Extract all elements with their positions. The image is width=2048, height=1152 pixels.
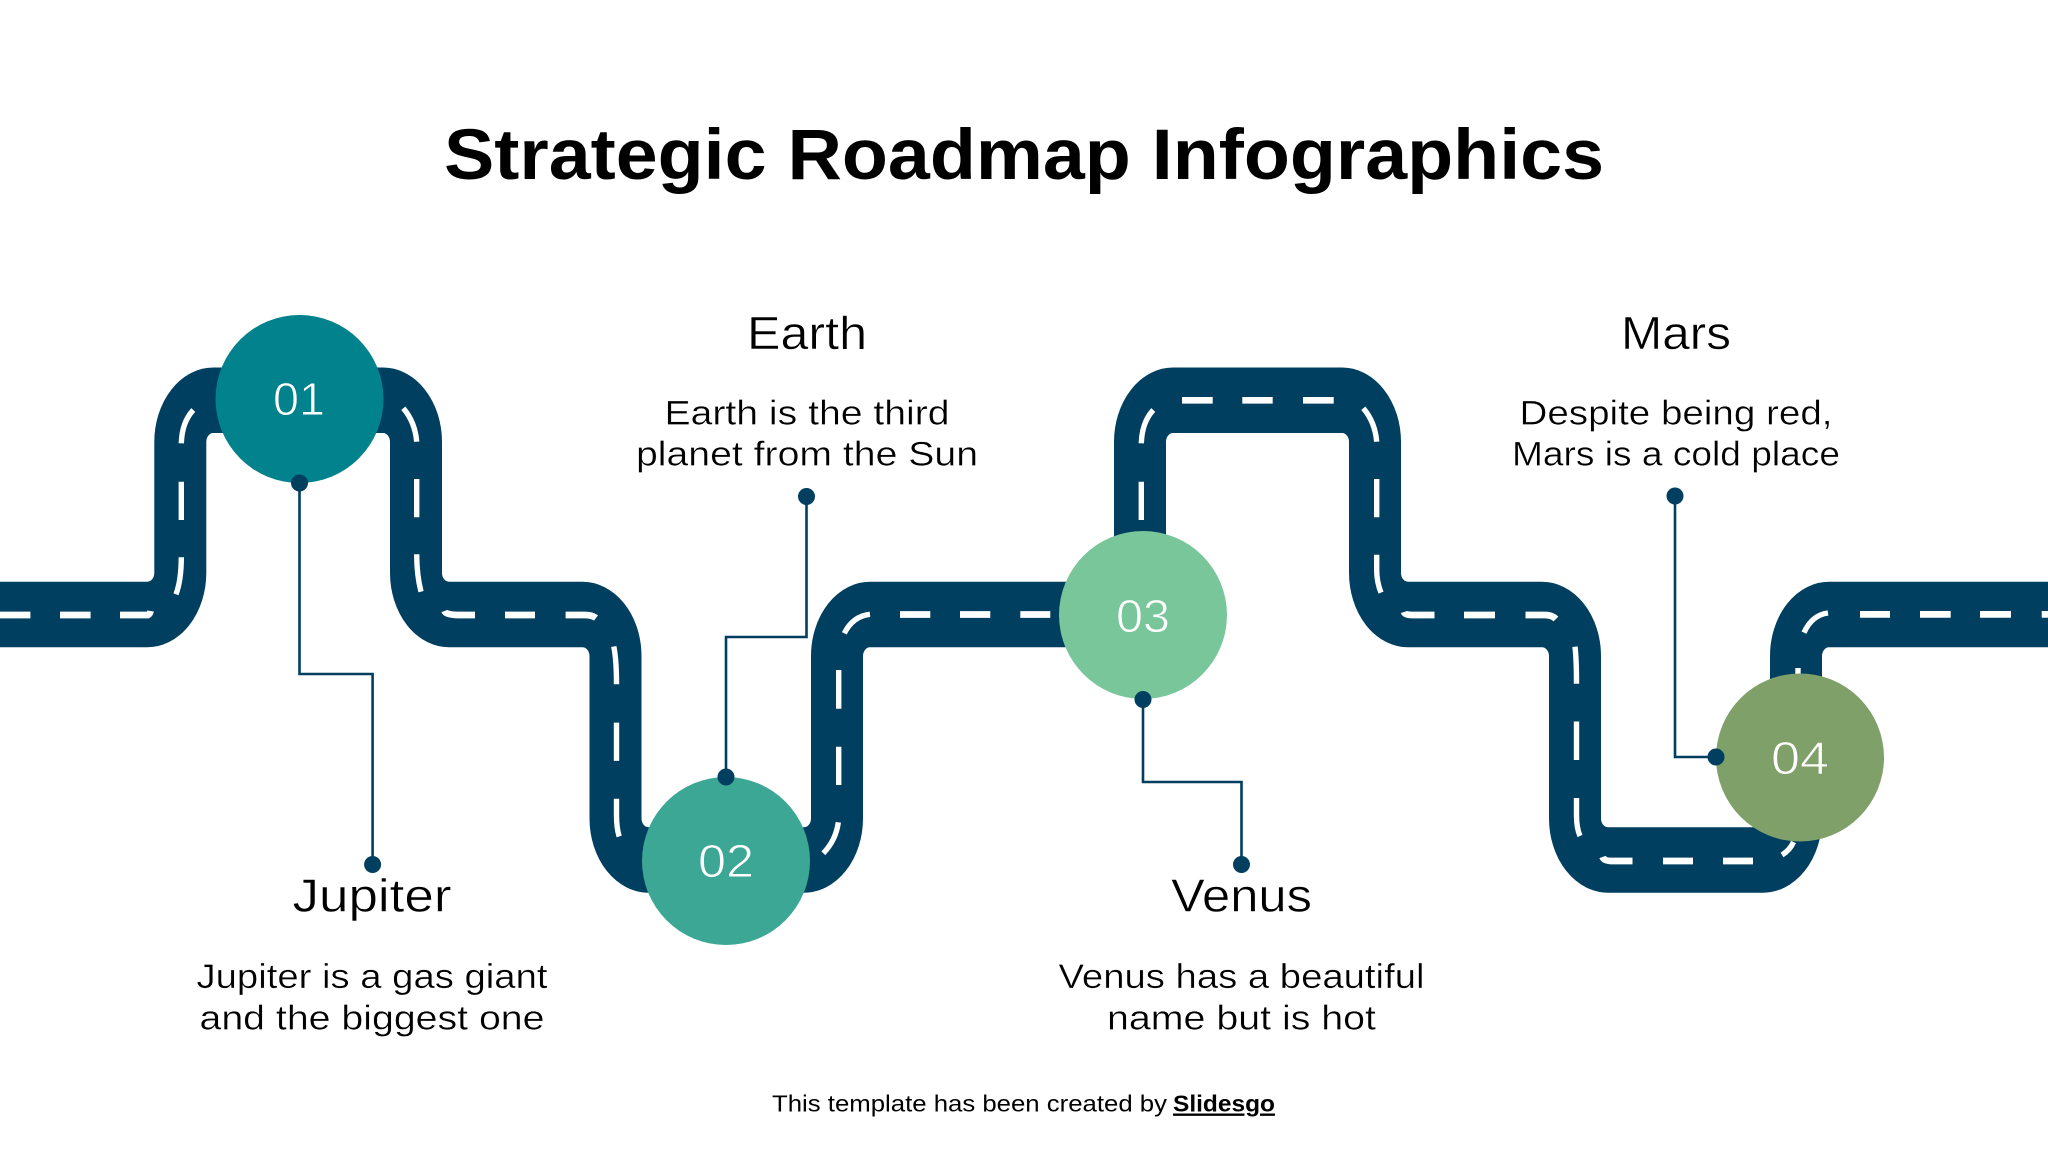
milestone 03: Venus <box>1058 531 1424 1038</box>
description: Earth: Earth is the third <box>664 394 950 432</box>
heading: Mars: Mars <box>1621 307 1731 359</box>
heading: Earth: Earth <box>747 307 867 359</box>
road surface <box>0 400 2048 860</box>
circle 02 <box>642 777 810 945</box>
milestone 02: Earth <box>636 307 978 945</box>
footer credit: This template has been created by <box>772 1090 1167 1116</box>
description: Venus <box>1058 958 1424 1038</box>
vertical and curved lane dashes <box>176 408 1828 855</box>
heading: Jupiter: Jupiter <box>292 870 452 922</box>
description: Jupiter: Jupiter is a gas giant <box>196 958 548 996</box>
description: Earth: planet from the Sun <box>636 436 978 474</box>
description: Mars: Mars is a cold place <box>1512 436 1840 474</box>
description: Earth <box>636 394 978 474</box>
connector 01 <box>291 474 381 873</box>
description: Venus: Venus has a beautiful <box>1058 958 1424 996</box>
number 04: 04 <box>1771 732 1829 784</box>
circle 04 <box>1716 674 1884 842</box>
description: Venus: name but is hot <box>1107 1000 1377 1038</box>
footer credit: Slidesgo <box>1173 1090 1275 1116</box>
number 02: 02 <box>698 835 754 887</box>
number 01: 01 <box>273 373 325 425</box>
number 03: 03 <box>1116 590 1170 642</box>
milestone 01: Jupiter <box>196 315 548 1038</box>
horizontal lane dashes <box>0 400 2048 861</box>
description: Mars <box>1512 394 1840 474</box>
connector 02 <box>718 488 815 786</box>
milestone 04: Mars <box>1512 307 1884 842</box>
circle 01 <box>216 315 384 483</box>
road <box>0 400 2048 861</box>
circle 03 <box>1059 531 1227 699</box>
title: Strategic Roadmap Infographics <box>444 116 1604 195</box>
connector 04 <box>1666 488 1724 766</box>
description: Jupiter <box>196 958 548 1038</box>
description: Jupiter: and the biggest one <box>200 1000 544 1038</box>
description: Mars: Despite being red, <box>1520 394 1832 432</box>
heading: Venus: Venus <box>1171 870 1312 922</box>
connector 03 <box>1134 691 1250 873</box>
